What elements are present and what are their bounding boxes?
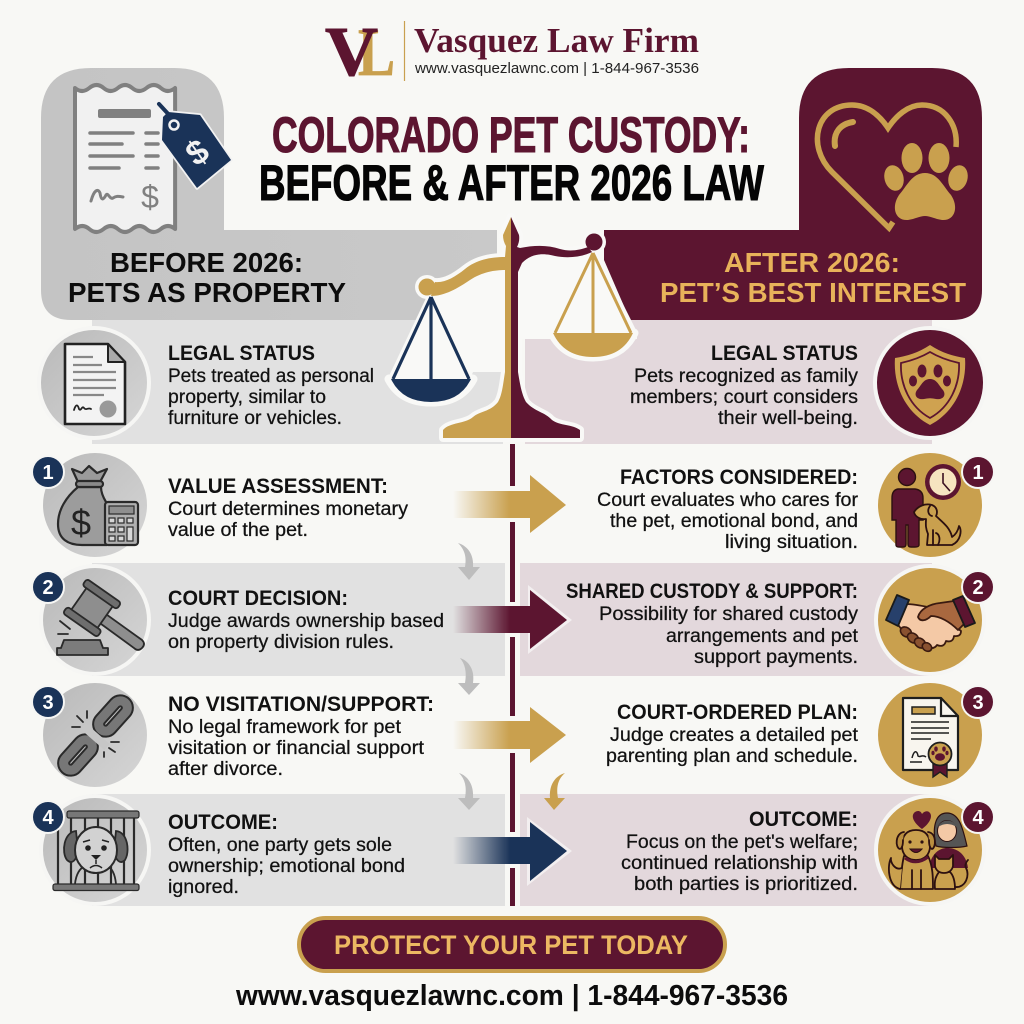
icon: person, clock and dog <box>892 464 961 547</box>
icon: receipt with price tag <box>75 85 231 232</box>
text: shared custody: arrangements and pet <box>666 626 859 647</box>
icon: document <box>65 344 125 424</box>
icon: broken chain <box>61 698 130 773</box>
right pan <box>553 253 633 357</box>
text: court-ordered plan: parenting plan and schedule. <box>606 746 858 767</box>
text: no visitation: NO VISITATION/SUPPORT: <box>168 693 434 716</box>
pillar and arm: maroon half <box>511 217 602 438</box>
text: factors considered: Court evaluates who cares for <box>597 490 859 511</box>
text: court decision: Judge awards ownership based <box>168 611 444 632</box>
heading: after 2026: AFTER 2026: <box>724 247 900 278</box>
pillar and arm: gold half <box>418 217 511 438</box>
badge 4 left <box>31 800 65 834</box>
badge 3 left <box>31 685 65 719</box>
text: factors considered: the pet, emotional bond, and <box>610 511 858 532</box>
text: outcome before: ownership; emotional bond <box>168 856 405 877</box>
arrow: maroon row 2 <box>453 585 572 654</box>
center timeline line <box>510 444 515 906</box>
text: court-ordered plan: COURT-ORDERED PLAN: <box>617 701 858 724</box>
text: value assessment: VALUE ASSESSMENT: <box>168 475 388 498</box>
panel: after 2026 header <box>604 68 982 320</box>
text: outcome after: Focus on the pet's welfare; <box>626 832 858 853</box>
row right 2: shared custody and support <box>520 563 995 676</box>
row right 4: outcome <box>520 794 995 906</box>
heading: before 2026 <box>68 247 346 308</box>
badge 2 left <box>31 570 65 604</box>
text: legal status before: Pets treated as personal <box>168 366 374 387</box>
badge 1 left <box>31 455 65 489</box>
badge 4 left: 4 <box>42 807 54 829</box>
icon: money bag and calculator <box>58 466 138 545</box>
icon: owner with dog and cat <box>889 811 968 889</box>
badge 3 right: 3 <box>972 692 984 714</box>
heading: before 2026: PETS AS PROPERTY <box>68 277 346 308</box>
badge 1 right: 1 <box>972 462 984 484</box>
row left 3: no visitation or support <box>31 683 434 787</box>
text: outcome before <box>168 811 405 898</box>
title: COLORADO PET CUSTODY: <box>272 107 750 163</box>
badge 4 right <box>961 800 995 834</box>
text: court decision: on property division rules. <box>168 632 394 653</box>
text: value assessment <box>168 475 409 541</box>
curved arrow: gold <box>544 773 565 810</box>
text: no visitation: No legal framework for pet <box>168 717 402 738</box>
row left 4: outcome <box>31 794 505 906</box>
text: outcome after: continued relationship with <box>621 853 858 874</box>
arrow: gold row 3 <box>453 707 566 763</box>
text: legal status after: LEGAL STATUS <box>711 342 858 365</box>
text: shared custody <box>566 580 859 668</box>
text: no visitation <box>168 693 434 780</box>
call to action button: PROTECT YOUR PET TODAY <box>334 930 688 960</box>
text: outcome after: both parties is prioritized. <box>634 874 858 895</box>
title <box>259 107 765 211</box>
icon: receipt with price tag: $ <box>141 179 159 215</box>
text: legal status before: furniture or vehicles. <box>168 408 342 429</box>
text: shared custody: Possibility for shared custody <box>599 604 859 625</box>
call to action button <box>299 918 725 971</box>
icon: shield with paw <box>895 345 965 425</box>
text: court-ordered plan: Judge creates a detailed pet <box>610 725 859 746</box>
text: outcome before: Often, one party gets sole <box>168 835 392 856</box>
logo monogram: V <box>325 14 378 91</box>
text: value assessment: value of the pet. <box>168 520 308 541</box>
icon: sad dog in cage <box>53 811 139 890</box>
text: value assessment: Court determines monetary <box>168 499 409 520</box>
text: legal status before <box>168 342 374 429</box>
text: legal status after <box>630 342 859 429</box>
title: BEFORE & AFTER 2026 LAW <box>259 155 765 211</box>
logo monogram: L <box>358 14 395 90</box>
badge 3 right <box>961 685 995 719</box>
text: outcome after: OUTCOME: <box>749 808 858 831</box>
text: outcome before: ignored. <box>168 877 239 898</box>
badge 4 right: 4 <box>972 807 984 829</box>
firm name: Vasquez Law Firm <box>414 21 699 60</box>
row left 2: court decision <box>31 563 505 676</box>
row right 1: factors considered <box>597 453 995 557</box>
text: outcome before: OUTCOME: <box>168 811 278 834</box>
icon: receipt with price tag: $ <box>179 132 216 174</box>
icon: heart with paw <box>817 105 971 228</box>
text: court decision <box>168 587 444 653</box>
badge 3 left: 3 <box>42 692 54 714</box>
text: no visitation: visitation or financial support <box>168 738 425 759</box>
badge 1 right <box>961 455 995 489</box>
row right: legal status <box>525 320 987 444</box>
footer contact: www.vasquezlawnc.com | 1-844-967-3536 <box>235 980 788 1012</box>
badge 2 left: 2 <box>42 577 54 599</box>
heading: after 2026: PET’S BEST INTEREST <box>660 277 966 308</box>
row left 1: value assessment <box>31 453 409 557</box>
text: factors considered <box>597 466 859 553</box>
text: no visitation: after divorce. <box>168 759 283 780</box>
arrow: gold row 1 <box>453 475 566 533</box>
logo header <box>325 14 699 91</box>
row left: legal status <box>37 320 503 444</box>
text: court decision: COURT DECISION: <box>168 587 348 610</box>
firm contact line: www.vasquezlawnc.com | 1-844-967-3536 <box>414 61 699 77</box>
text: factors considered: FACTORS CONSIDERED: <box>620 466 858 489</box>
badge 2 right <box>961 570 995 604</box>
text: court-ordered plan <box>606 701 859 767</box>
text: shared custody: support payments. <box>694 647 858 668</box>
icon: balance scale <box>389 217 637 438</box>
text: legal status before: LEGAL STATUS <box>168 342 315 365</box>
text: legal status after: their well-being. <box>718 408 858 429</box>
badge 1 left: 1 <box>42 462 54 484</box>
text: legal status after: members; court considers <box>630 387 858 408</box>
curved arrow: grey 2 <box>458 658 480 695</box>
heading: after 2026 <box>660 247 966 308</box>
arrow: navy row 4 <box>453 817 572 886</box>
icon: money bag and calculator: $ <box>71 502 91 543</box>
text: outcome after <box>621 808 858 895</box>
text: legal status after: Pets recognized as family <box>634 366 859 387</box>
left pan <box>391 297 471 402</box>
text: factors considered: living situation. <box>725 532 858 553</box>
badge 2 right: 2 <box>972 577 984 599</box>
icon: gavel <box>57 579 144 655</box>
text: legal status before: property, similar to <box>168 387 326 408</box>
icon: certificate <box>903 698 958 777</box>
curved arrow: grey 1 <box>458 543 480 580</box>
icon: handshake <box>886 595 975 653</box>
text: shared custody: SHARED CUSTODY & SUPPORT: <box>566 580 858 603</box>
row right 3: court-ordered plan <box>606 683 995 787</box>
heading: before 2026: BEFORE 2026: <box>110 247 303 278</box>
curved arrow: grey 3 <box>458 773 480 810</box>
panel: before 2026 header <box>41 68 497 320</box>
